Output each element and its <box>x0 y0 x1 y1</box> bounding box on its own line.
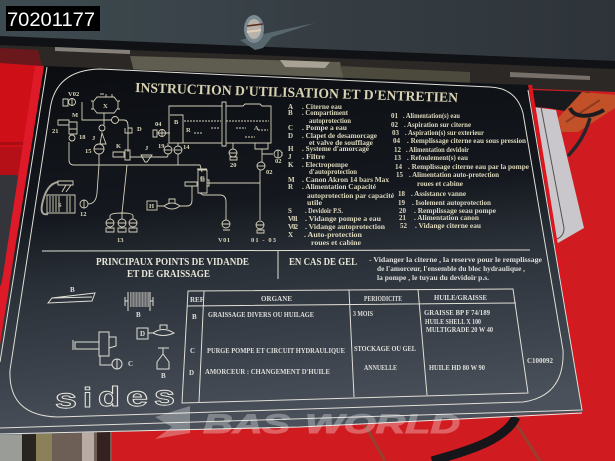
table rows: GRAISSAGE DIVERS OU HUILAGE <box>208 311 314 319</box>
legend right column: . Remplissage seau pompe <box>414 207 496 215</box>
frost instructions <box>289 256 542 282</box>
pipework <box>69 102 273 220</box>
diagram labels: 13 <box>117 237 124 244</box>
legend left column: M <box>288 176 295 184</box>
sides logo: d <box>98 381 120 412</box>
diagram labels: 15 <box>85 148 92 155</box>
icon: motor D: D <box>140 330 145 338</box>
hose reel S <box>42 181 75 214</box>
red plate edge <box>0 66 44 340</box>
maintenance table <box>182 289 528 403</box>
diagram labels: V01 <box>218 237 230 244</box>
icon: reel B: B <box>136 311 141 319</box>
legend left column: autoprotection <box>309 117 351 125</box>
table rows: 3 MOIS <box>353 310 373 318</box>
greasing point icons <box>48 286 174 380</box>
white box right of plate <box>533 107 584 243</box>
table header: ORGANE <box>261 295 292 303</box>
diagram labels: 01 - 03 <box>251 237 277 244</box>
legend left column: et valve de soufflage <box>309 139 373 147</box>
serial number label: 70201177 <box>7 10 95 31</box>
legend left column: . Auto-protection <box>304 231 362 239</box>
legend right column: . Vidange citerne eau <box>415 222 481 230</box>
table rows: AMORCEUR : CHANGEMENT D'HUILE <box>205 368 330 376</box>
legend right column: . Alimentation devidoir <box>406 146 469 154</box>
section divider <box>42 250 530 279</box>
legend left column: V02 <box>288 223 298 231</box>
icon: rail B: B <box>70 286 75 294</box>
legend left column: . Vidange pompe a eau <box>305 215 381 223</box>
legend left column: J <box>288 153 292 161</box>
heading: main draining and greasing points <box>96 257 249 280</box>
legend left column: . Pompe a eau <box>302 124 347 132</box>
beam shadow and rusty strip <box>0 36 615 92</box>
table rows: PURGE POMPE ET CIRCUIT HYDRAULIQUE <box>207 347 345 355</box>
diagram labels: J <box>145 145 149 152</box>
legend right column <box>391 112 529 230</box>
legend right column: . Alimentation canon <box>414 214 479 222</box>
diagram labels: 20 <box>230 162 236 169</box>
table grid <box>182 289 528 403</box>
diagram labels: M <box>72 112 78 119</box>
legend right column: 18 <box>398 190 406 198</box>
diagram labels: 14 <box>183 144 190 151</box>
plate bottom edge highlight <box>0 413 582 434</box>
canon M <box>58 120 77 134</box>
legend left column: roues et cabine <box>311 239 361 247</box>
motor H <box>147 199 180 210</box>
legend left column: . Canon Akron 14 bars Max <box>302 176 390 184</box>
sides logo: s <box>154 380 175 411</box>
table rows: B <box>192 313 197 321</box>
watermark: BAS <box>203 409 290 439</box>
legend right column: . Isolement autoprotection <box>412 199 491 207</box>
table rows <box>189 309 493 377</box>
table rows: MULTIGRADE 20 W 40 <box>426 326 493 334</box>
reference code: C100092 <box>527 357 553 365</box>
table rows: C <box>190 347 195 355</box>
legend right column: . Refoulement(s) eau <box>407 154 468 162</box>
legend right column: . Assistance vanne <box>411 190 466 198</box>
legend right column: 03 <box>392 129 400 137</box>
legend left column: autoprotection par capacité <box>307 192 394 200</box>
diagram labels: 12 <box>80 211 86 218</box>
plate inner rounded border <box>10 69 563 417</box>
legend right column: 13 <box>394 154 402 162</box>
table rows: GRAISSE BP F 74/189 <box>424 309 490 317</box>
diagram labels: 02 <box>275 158 282 165</box>
table header <box>190 294 487 304</box>
legend right column: 14 <box>395 163 402 171</box>
diagram labels: 18 <box>79 134 86 141</box>
diagram labels: 04 <box>155 121 162 128</box>
valves and gauges <box>63 98 282 233</box>
frost instructions: EN CAS DE GEL <box>289 257 357 268</box>
title: INSTRUCTION D'UTILISATION ET D'ENTRETIEN <box>135 81 458 106</box>
auto-protection tank X: X <box>103 103 108 110</box>
legend right column: 02 <box>391 121 398 129</box>
black hose bottom right <box>432 417 516 461</box>
legend right column: . Remplissage citerne eau sous pression <box>407 137 526 145</box>
pump C <box>185 169 209 193</box>
copper pipes bottom <box>365 425 540 461</box>
legend right column: 21 <box>399 214 406 222</box>
auto-protection tank X <box>91 94 120 113</box>
table rows: ANNUELLE <box>364 364 397 372</box>
outlets 13 <box>106 213 137 232</box>
sides logo: s <box>55 383 77 414</box>
legend right column: roues et cabine <box>417 180 463 188</box>
legend left column: D <box>288 132 293 140</box>
upper metal beam <box>0 0 615 64</box>
legend right column: 52 <box>400 222 408 230</box>
lower left hose and machinery <box>0 428 112 461</box>
frost instructions: - Vidanger la citerne , la reserve pour le remplissage <box>369 256 542 264</box>
diagram labels: J <box>92 135 96 142</box>
legend left column: utile <box>307 199 322 207</box>
legend left column: . Compartiment <box>302 109 349 117</box>
legend left column <box>288 103 394 247</box>
legend left column: C <box>288 124 293 132</box>
tank: R <box>186 127 191 134</box>
watermark <box>155 406 460 439</box>
tank: A <box>254 125 259 132</box>
sides logo: i <box>83 382 92 413</box>
legend left column: R <box>288 183 294 191</box>
legend left column: . Systeme d'amorcage <box>302 145 369 153</box>
legend right column: 04 <box>393 137 400 145</box>
legend left column: V01 <box>288 215 298 223</box>
diagram labels: C <box>200 175 205 182</box>
icon: valve B: B <box>161 372 166 380</box>
legend left column: H <box>288 145 294 153</box>
frost instructions: la pompe , le tuyau du devidoir p.s. <box>377 274 489 282</box>
legend right column: 01 <box>391 112 398 120</box>
legend left column: B <box>288 109 293 117</box>
hose reel S: S <box>58 202 62 209</box>
icon: pump C: C <box>128 360 133 368</box>
legend left column: S <box>288 207 292 215</box>
plate <box>0 66 583 435</box>
diagram labels: 02 <box>266 169 272 176</box>
table rows: HUILE HD 80 W 90 <box>429 364 485 372</box>
legend right column: 20 <box>399 207 406 215</box>
legend left column: . Electropompe <box>302 161 348 169</box>
legend left column: . Vidange autoprotection <box>305 223 385 231</box>
legend left column: . Clapet de desamorcage <box>302 132 377 140</box>
legend left column: X <box>288 231 293 239</box>
dark area behind right side <box>530 90 590 112</box>
orange wires <box>558 92 615 156</box>
legend right column: . Remplissage citerne eau par la pompe <box>408 163 529 171</box>
screw <box>240 15 315 50</box>
diagram labels: V02 <box>68 91 79 98</box>
legend right column: 19 <box>398 199 406 207</box>
sides logo <box>55 380 175 414</box>
tank: B <box>174 119 179 126</box>
table header: HUILE/GRAISSE <box>434 294 487 302</box>
diagram labels: 21 <box>52 128 58 135</box>
table header: REF <box>190 296 204 304</box>
table header: PERIODICITE <box>364 295 402 303</box>
filter and electropump K <box>100 128 152 162</box>
heading: main draining and greasing points: ET DE GRAISSAGE <box>127 269 210 280</box>
legend right column: 15 <box>396 171 404 179</box>
diagram labels: 19 <box>158 143 165 150</box>
legend right column: . Alimentation auto-protection <box>409 171 499 179</box>
legend left column: . Filtre <box>302 153 325 161</box>
legend left column: d'autoprotection <box>309 168 357 176</box>
table rows: STOCKAGE OU GEL <box>354 345 416 353</box>
watermark: WORLD <box>305 409 460 439</box>
legend right column: 12 <box>394 146 402 154</box>
diagram labels: K <box>116 143 121 150</box>
plate outer border <box>0 67 582 428</box>
legend left column: K <box>288 161 294 169</box>
legend right column: . Alimentation(s) eau <box>403 112 460 120</box>
tank <box>169 102 271 149</box>
legend right column: . Aspiration(s) sur exterieur <box>405 129 484 137</box>
sides logo: e <box>126 381 148 412</box>
table rows: D <box>189 369 194 377</box>
motor H: H <box>149 203 154 210</box>
diagram labels <box>52 91 282 244</box>
diagram labels: D <box>137 126 142 133</box>
legend left column: . Devidoir P.S. <box>305 207 343 215</box>
legend left column: . Alimentation Capacité <box>302 183 376 191</box>
heading: main draining and greasing points: PRINCIPAUX POINTS DE VIDANDE <box>96 257 249 268</box>
legend left column: A <box>288 103 293 111</box>
legend left column: . Citerne eau <box>302 103 342 111</box>
legend right column: . Aspiration sur citerne <box>404 121 471 129</box>
table rows: HUILE SHELL X 100 <box>425 318 481 326</box>
hydraulic diagram <box>42 91 282 244</box>
frost instructions: de l'amorceur, l'ensemble du bloc hydraulique , <box>377 265 525 273</box>
red panel left <box>0 63 42 285</box>
